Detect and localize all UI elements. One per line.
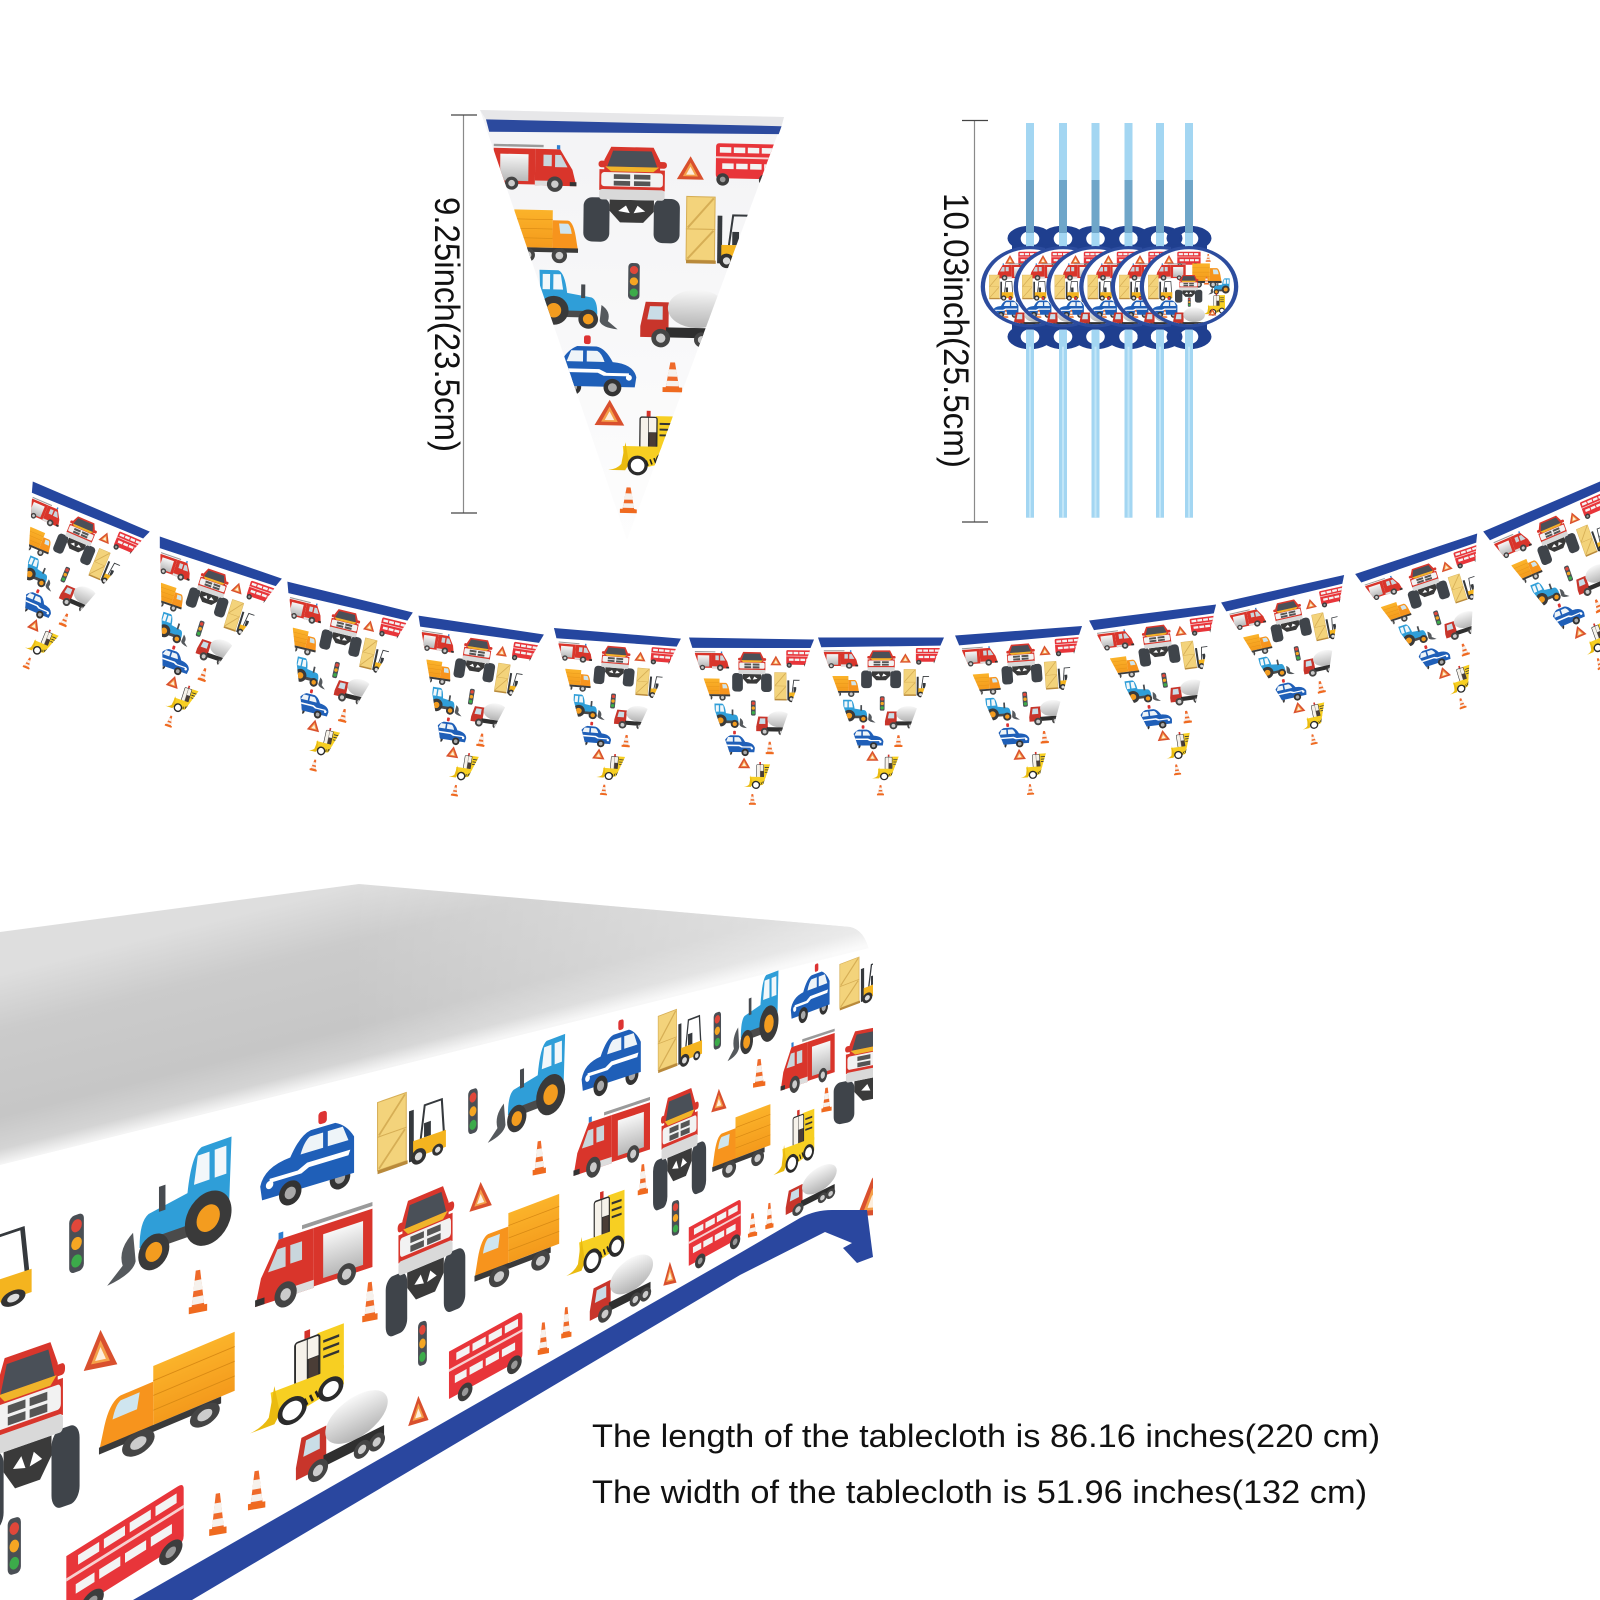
straw card 5 <box>1111 123 1209 518</box>
garland pennant 1 <box>0 481 150 704</box>
straw card 6 <box>1140 123 1238 518</box>
cone <box>362 1281 378 1322</box>
traffic light <box>8 1516 21 1576</box>
traffic light <box>672 1199 679 1236</box>
tractor <box>107 1137 232 1286</box>
monster truck, cut at edge <box>0 1342 80 1526</box>
straw card 2 <box>1014 123 1112 518</box>
bulldozer <box>773 1104 814 1178</box>
bulldozer <box>566 1190 624 1276</box>
garland pennant 11 <box>1355 533 1527 739</box>
garland pennant 4 <box>389 615 544 817</box>
warning triangle, cut at edge <box>857 1177 888 1216</box>
forklift <box>377 1092 446 1174</box>
garbage truck <box>712 1104 770 1184</box>
garbage truck <box>99 1332 235 1471</box>
garland pennant 10 <box>1221 574 1378 769</box>
cone <box>533 1140 546 1175</box>
cone <box>765 1202 773 1229</box>
fire truck <box>255 1202 372 1317</box>
garland pennant 3 <box>247 581 413 798</box>
tablecloth size caption <box>592 1418 1380 1510</box>
large pennant flag <box>475 110 784 543</box>
cone <box>209 1492 227 1536</box>
caption: length: The length of the tablecloth is 86.16 inches(220 cm) <box>592 1418 1380 1454</box>
traffic light <box>69 1212 84 1274</box>
cone <box>748 1212 757 1238</box>
pennant banner garland <box>0 480 1600 817</box>
monster truck, cut at edge <box>834 1028 873 1124</box>
tablecloth <box>0 884 910 1600</box>
tablecloth top surface <box>0 884 869 1167</box>
straw card 1 <box>981 123 1079 518</box>
bulldozer <box>250 1316 344 1438</box>
straw card 3 <box>1046 123 1145 518</box>
cone <box>821 1087 832 1112</box>
label: straw height: 10.03inch(25.5cm) <box>936 193 975 468</box>
traffic light <box>418 1320 427 1367</box>
garbage truck <box>474 1194 559 1296</box>
double decker bus <box>66 1483 184 1600</box>
garland pennant 2 <box>103 536 282 759</box>
police car <box>790 963 830 1024</box>
warning triangle <box>408 1393 429 1426</box>
traffic light <box>714 1011 721 1050</box>
garland pennant 5 <box>539 628 681 811</box>
cone <box>538 1321 549 1355</box>
caption: width: The width of the tablecloth is 51.96 inches(132 cm) <box>592 1474 1367 1510</box>
warning triangle <box>663 1260 677 1286</box>
garland pennant 12 <box>1483 480 1600 706</box>
tablecloth front drop <box>0 948 873 1600</box>
garland pennant 7 <box>817 637 944 806</box>
garland pennant 6 <box>689 637 815 817</box>
monster truck <box>386 1177 465 1339</box>
cone <box>189 1268 207 1314</box>
straws with lantern cards <box>981 123 1238 518</box>
police car <box>582 1019 641 1096</box>
forklift, cut at edge <box>0 1226 32 1307</box>
tablecloth vehicle print <box>0 947 910 1600</box>
warning triangle <box>711 1087 727 1112</box>
tractor <box>488 1034 565 1143</box>
straw card 4 <box>1079 123 1178 518</box>
forklift <box>658 1008 702 1074</box>
dimension: pennant height <box>427 115 477 513</box>
cement mixer <box>786 1158 837 1222</box>
warning triangle <box>84 1327 117 1371</box>
cone <box>753 1058 765 1088</box>
dimension: straw height <box>936 120 988 522</box>
fire truck <box>781 1029 835 1097</box>
fire truck <box>573 1097 650 1184</box>
label: pennant height: 9.25inch(23.5cm) <box>427 197 466 452</box>
warning triangle <box>469 1179 492 1212</box>
tractor <box>728 970 778 1061</box>
forklift <box>839 956 873 1010</box>
cement mixer <box>590 1247 653 1330</box>
double decker bus <box>449 1311 522 1409</box>
garland pennant 8 <box>955 625 1095 811</box>
double decker bus <box>689 1199 741 1274</box>
cone <box>561 1306 571 1339</box>
monster truck <box>653 1082 706 1212</box>
garland pennant 9 <box>1089 604 1242 794</box>
police car <box>260 1110 354 1206</box>
cement mixer <box>296 1380 388 1492</box>
cone <box>638 1163 648 1195</box>
cone <box>248 1469 265 1510</box>
tablecloth blue hem <box>133 1210 873 1600</box>
traffic light <box>468 1087 478 1135</box>
